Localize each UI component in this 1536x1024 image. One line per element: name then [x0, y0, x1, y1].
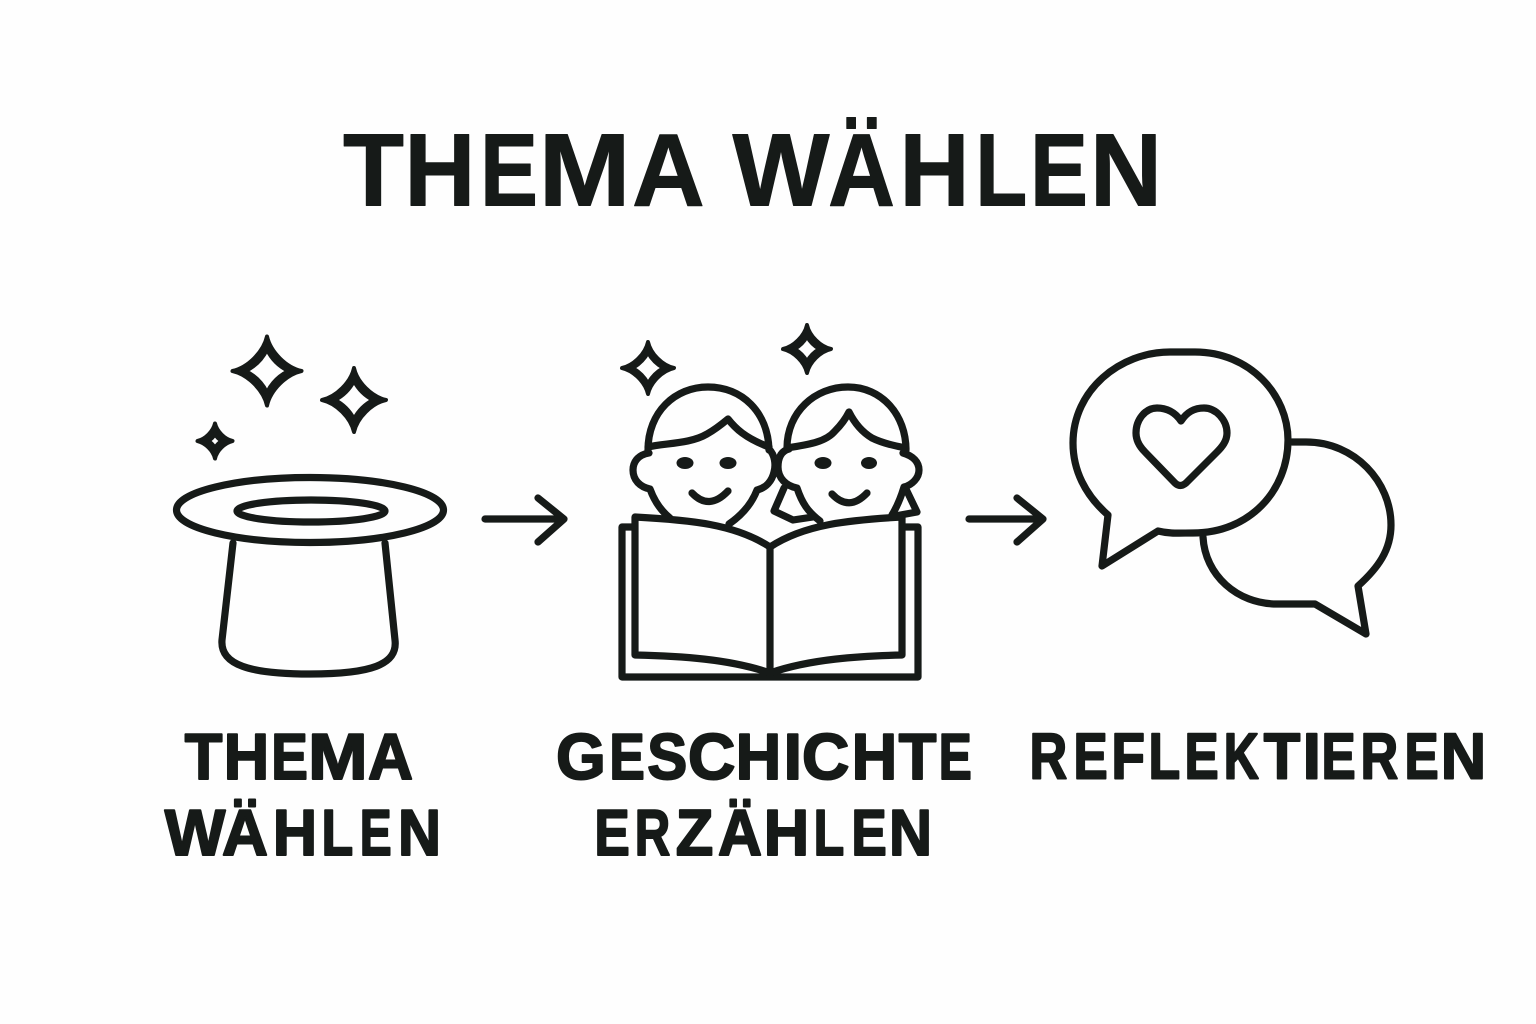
sparkle: medium [322, 368, 386, 432]
label: Reflektieren: R [1360, 720, 1398, 792]
label: Geschichte erzählen: I [784, 720, 802, 793]
label: Reflektieren: N [1441, 720, 1486, 792]
label: Geschichte erzählen: T [899, 720, 936, 793]
sparkle: large [232, 336, 302, 406]
hat body [222, 543, 395, 674]
label: Reflektieren: I [1303, 720, 1321, 792]
back speech bubble [1203, 442, 1391, 634]
label: Reflektieren: E [1322, 720, 1356, 792]
label: Thema wählen: T [185, 720, 222, 793]
label: Thema wählen: Ä [222, 796, 268, 869]
child: right [774, 387, 919, 521]
title: N [1090, 112, 1162, 228]
label: Geschichte erzählen: H [852, 720, 897, 793]
label: Thema wählen: M [308, 720, 368, 793]
label: Geschichte erzählen: N [889, 796, 932, 869]
label: Thema wählen: A [368, 720, 413, 793]
title: W [732, 112, 830, 228]
title: H [404, 112, 475, 228]
label: Thema wählen: H [273, 796, 317, 869]
label: Reflektieren: T [1264, 720, 1300, 792]
label: Thema wählen: L [322, 796, 353, 869]
open book [622, 517, 918, 677]
label: Geschichte erzählen: Z [676, 796, 713, 869]
icon: magic hat with sparkles [176, 336, 444, 674]
title: E [480, 112, 538, 228]
label: Thema wählen: N [398, 796, 441, 869]
label: Thema wählen: E [360, 796, 392, 869]
title: T [343, 112, 404, 228]
label: Geschichte erzählen: G [556, 720, 606, 793]
title: M [539, 112, 631, 228]
label: Reflektieren: L [1148, 720, 1180, 792]
label: Geschichte erzählen: C [802, 720, 849, 793]
arrow: hat to book [485, 498, 564, 542]
sparkle: small [198, 424, 232, 458]
label: Thema wählen: H [224, 720, 269, 793]
label: Geschichte erzählen: E [851, 796, 887, 869]
label: Geschichte erzählen: S [647, 720, 687, 793]
label: Geschichte erzählen: H [764, 796, 809, 869]
label: Geschichte erzählen: E [609, 720, 645, 793]
label: Geschichte erzählen: E [594, 796, 630, 869]
label: Thema wählen: E [271, 720, 308, 793]
label: Geschichte erzählen: R [635, 796, 670, 869]
label: Reflektieren [1030, 720, 1486, 792]
label: Reflektieren: E [1184, 720, 1219, 792]
sparkle: left [622, 342, 674, 394]
title: L [975, 112, 1027, 228]
title: E [1030, 112, 1088, 228]
hat opening [237, 500, 385, 522]
label: Reflektieren: E [1074, 720, 1108, 792]
label: Geschichte erzählen: H [736, 720, 781, 793]
label: Thema wählen [165, 720, 441, 869]
title: Ä [828, 112, 895, 228]
label: Thema wählen: W [165, 796, 226, 869]
front speech bubble [1073, 352, 1288, 566]
icon: speech bubbles with heart [1073, 352, 1391, 634]
label: Geschichte erzählen: Ä [718, 796, 762, 869]
label: Geschichte erzählen [556, 720, 972, 869]
label: Geschichte erzählen: L [814, 796, 844, 869]
child: left [633, 387, 775, 524]
label: Reflektieren: R [1030, 720, 1067, 792]
icon: two children reading a book [622, 325, 919, 677]
title: A [632, 112, 702, 228]
sparkle: right [783, 325, 831, 373]
title: H [900, 112, 970, 228]
arrow: book to speech bubbles [969, 498, 1043, 542]
label: Reflektieren: K [1224, 720, 1259, 792]
hat brim [176, 478, 444, 542]
label: Geschichte erzählen: C [688, 720, 735, 793]
label: Reflektieren: F [1111, 720, 1145, 792]
label: Geschichte erzählen: E [939, 720, 972, 793]
heart [1136, 408, 1227, 486]
label: Reflektieren: E [1404, 720, 1439, 792]
